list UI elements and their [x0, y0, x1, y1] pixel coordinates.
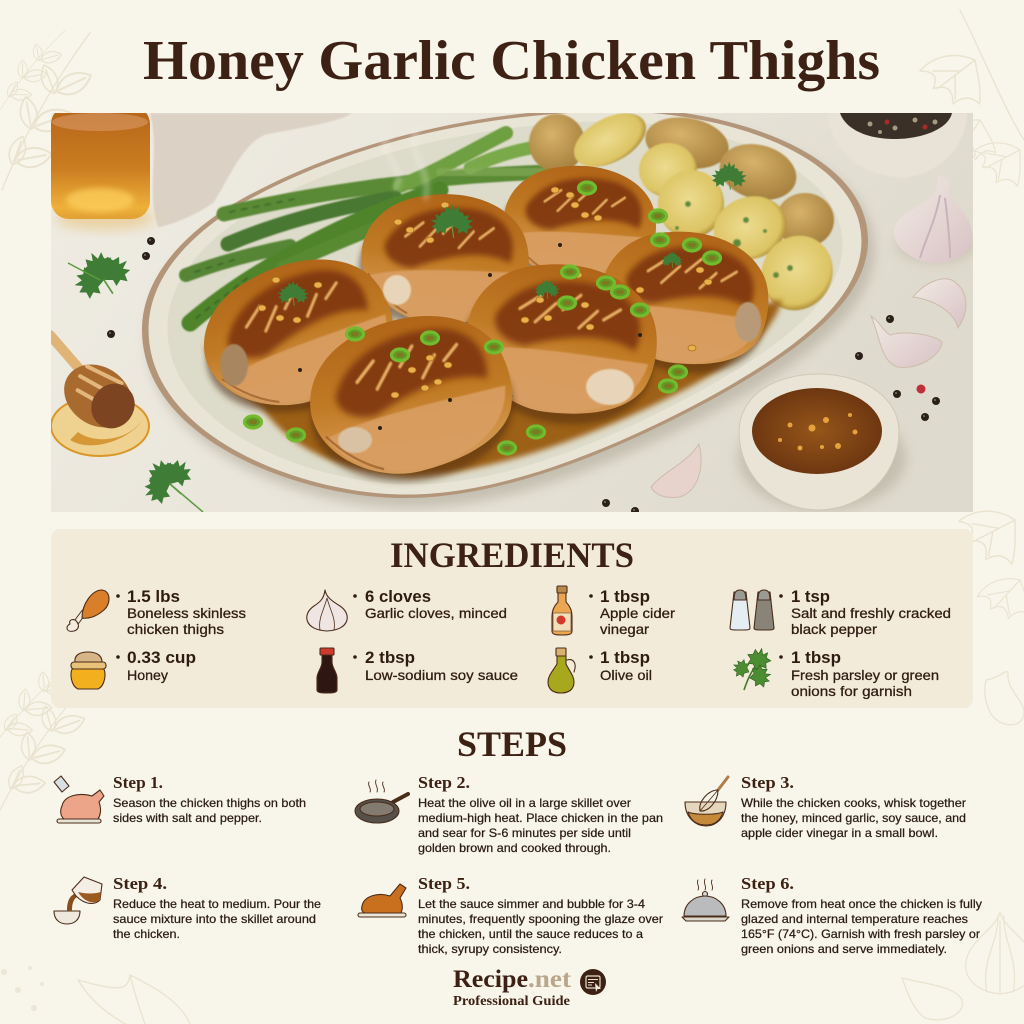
step 5 text: Let the sauce simmer and bubble for 3-4: [418, 897, 645, 911]
table surface: [51, 113, 973, 512]
ingredient: parsley or green onions: [779, 649, 939, 699]
ingredient: soy sauce: [353, 649, 518, 683]
ingredient: garlic: [353, 588, 507, 621]
panel: ingredients: [51, 529, 973, 708]
ingredient: salt and pepper: black pepper: [791, 621, 877, 637]
step 4 text: sauce mixture into the skillet around: [113, 912, 316, 926]
ingredients heading: INGREDIENTS: [390, 535, 634, 575]
asparagus: [186, 133, 550, 323]
icon: serving cloche: [682, 879, 729, 921]
footer brand: .net: [528, 966, 572, 993]
ingredient: salt and pepper: Salt and freshly cracked: [791, 605, 951, 621]
ingredient: olive oil: Olive oil: [600, 667, 652, 683]
ingredient: soy sauce: 2 tbsp: [365, 649, 415, 667]
ingredient: garlic: 6 cloves: [365, 588, 431, 606]
icon: whisk and bowl: [685, 777, 728, 826]
ingredient: chicken thighs: [116, 588, 246, 637]
step 4 text: Step 4.: [113, 874, 167, 893]
step 6 text: [741, 874, 982, 956]
step 5 text: Step 5.: [418, 874, 470, 893]
step 4 text: the chicken.: [113, 927, 180, 941]
ingredient: apple cider vinegar: Apple cider: [600, 605, 675, 621]
plate: [142, 108, 874, 508]
icon: recipe card: [580, 969, 606, 995]
step 3: [685, 773, 966, 840]
step 4: [54, 874, 321, 941]
ingredient: honey: Honey: [127, 667, 168, 683]
ingredient: olive oil: [589, 649, 652, 683]
honey dipper with puddle: [50, 335, 149, 456]
step 1 text: Step 1.: [113, 773, 163, 792]
step 5: [358, 874, 663, 956]
step 4 text: [113, 874, 321, 941]
dipping sauce bowl: [738, 374, 906, 510]
ingredient: parsley or green onions: 1 tbsp: [791, 649, 841, 667]
step 6 text: 165°F (74°C). Garnish with fresh parsley or: [741, 927, 980, 941]
footer brand: Professional Guide: [453, 993, 570, 1008]
garlic cloves: [651, 279, 966, 498]
step 6 text: green onions and serve immediately.: [741, 942, 947, 956]
ingredient: honey: 0.33 cup: [127, 649, 196, 667]
step 4 text: Reduce the heat to medium. Pour the: [113, 897, 321, 911]
ingredient: salt and pepper: 1 tsp: [791, 588, 830, 606]
ingredient: chicken thighs: Boneless skinless: [127, 605, 246, 621]
green onions: [244, 182, 720, 454]
step 5 text: thick, syrupy consistency.: [418, 942, 562, 956]
step 2: [355, 773, 663, 855]
hero photo: plated honey garlic chicken: [50, 102, 976, 515]
step 2 text: and sear for S-6 minutes per side until: [418, 826, 631, 840]
garlic bulb: [894, 176, 976, 263]
ingredient: olive oil: 1 tbsp: [600, 649, 650, 667]
sauce on the plate: [205, 300, 782, 477]
parsley on table: [61, 239, 203, 515]
ingredient: parsley or green onions: onions for garnish: [791, 683, 912, 699]
ingredient: apple cider vinegar: vinegar: [600, 621, 649, 637]
step 1: [54, 773, 306, 825]
ingredient: chicken thighs: chicken thighs: [127, 621, 224, 637]
title: Honey Garlic Chicken Thighs: [143, 30, 880, 92]
step 3 text: the honey, minced garlic, soy sauce, and: [741, 811, 966, 825]
steam: [384, 125, 427, 200]
icon: garlic: [307, 590, 347, 631]
step 1 text: sides with salt and pepper.: [113, 811, 262, 825]
ingredient: apple cider vinegar: [589, 588, 675, 637]
step 3 text: apple cider vinegar in a small bowl.: [741, 826, 938, 840]
footer brand: Recipe: [453, 966, 528, 993]
step 2 text: Heat the olive oil in a large skillet over: [418, 796, 631, 810]
step 2 text: Step 2.: [418, 773, 470, 792]
icon: apple cider vinegar: [552, 586, 572, 635]
peppercorn bowl: [840, 113, 962, 150]
step 2 text: golden brown and cooked through.: [418, 841, 611, 855]
icon: parsley: [730, 646, 773, 690]
ingredient: parsley or green onions: Fresh parsley or green: [791, 667, 939, 683]
parsley garnish on chicken: [275, 162, 749, 306]
step 5 text: [418, 874, 663, 956]
ingredient: salt and pepper: [779, 588, 951, 637]
step 3 text: [741, 773, 966, 840]
ingredient: soy sauce: Low-sodium soy sauce: [365, 667, 518, 683]
icon: roasted chicken: [358, 884, 406, 917]
steps heading: STEPS: [457, 724, 567, 764]
step 2 text: medium-high heat. Place chicken in the pan: [418, 811, 663, 825]
icon: chicken leg: [67, 590, 109, 631]
footer brand: [453, 966, 606, 1008]
potatoes: [528, 113, 835, 312]
towel: [150, 113, 352, 227]
ingredient: garlic: Garlic cloves, minced: [365, 605, 507, 621]
icon: olive oil: [548, 648, 575, 693]
step 6 text: Remove from heat once the chicken is fully: [741, 897, 982, 911]
peppercorns: [107, 237, 940, 515]
step 6 text: Step 6.: [741, 874, 794, 893]
chicken thighs: [202, 166, 768, 486]
step 6 text: glazed and internal temperature reaches: [741, 912, 968, 926]
icon: soy sauce bottle: [317, 648, 337, 693]
icon: pouring sauce: [54, 877, 102, 924]
honey jar: [51, 106, 155, 230]
step 3 text: While the chicken cooks, whisk together: [741, 796, 966, 810]
step 3 text: Step 3.: [741, 773, 794, 792]
step 2 text: [418, 773, 663, 855]
step 1 text: [113, 773, 306, 825]
garlic bits and glaze speckles: [258, 187, 712, 430]
ingredient: honey: [116, 649, 196, 683]
icon: seasoning raw chicken: [54, 776, 104, 823]
step 1 text: Season the chicken thighs on both: [113, 796, 306, 810]
ingredient: chicken thighs: 1.5 lbs: [127, 588, 180, 606]
step 5 text: the chicken, until the sauce reduces to a: [418, 927, 643, 941]
step 5 text: minutes, frequently spooning the glaze over: [418, 912, 663, 926]
panel background: [51, 529, 973, 708]
icon: skillet: [355, 780, 408, 823]
step 6: [682, 874, 982, 956]
icon: honey jar: [71, 652, 106, 689]
icon: salt and pepper shakers: [730, 590, 774, 630]
ingredient: apple cider vinegar: 1 tbsp: [600, 588, 650, 606]
